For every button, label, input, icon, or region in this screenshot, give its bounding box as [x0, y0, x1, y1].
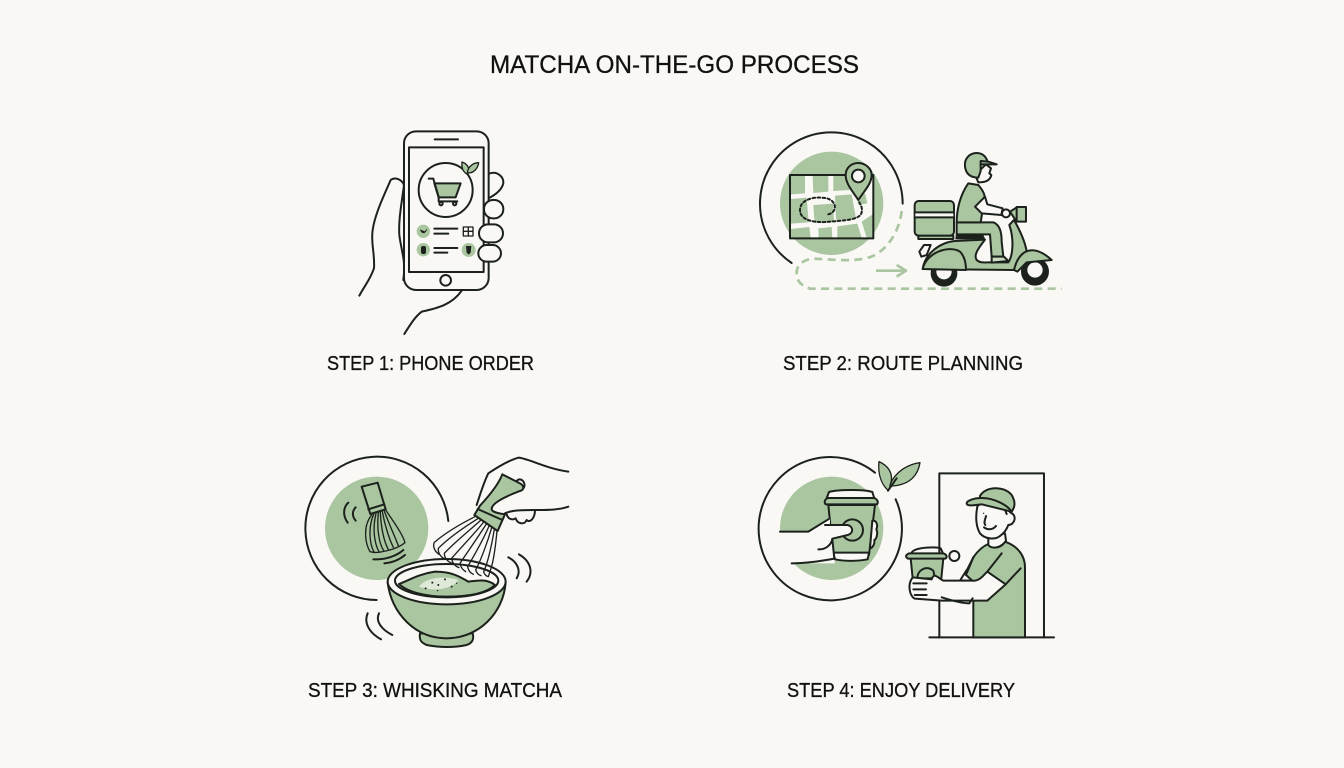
label: step 3: STEP 3: WHISKING MATCHA [308, 680, 563, 702]
icon: circle and leaves [759, 457, 920, 600]
title: MATCHA ON-THE-GO PROCESS [490, 51, 859, 79]
icon: map with route [760, 132, 1062, 289]
icon: hand with large whisk [434, 458, 568, 577]
panel: step 1 phone order [327, 131, 534, 375]
label: step 4: STEP 4: ENJOY DELIVERY [787, 680, 1015, 702]
icon: matcha bowl [366, 554, 530, 647]
panel: step 3 whisking matcha [305, 457, 568, 702]
label: step 2: STEP 2: ROUTE PLANNING [783, 353, 1023, 375]
panel: step 4 enjoy delivery [759, 457, 1054, 702]
icon: hand holding cup [775, 477, 883, 580]
label: step 1: STEP 1: PHONE ORDER [327, 353, 534, 375]
icon: scooter rider with delivery box [915, 153, 1052, 287]
icon: hand holding phone [359, 131, 503, 334]
icon: small whisk in circle [305, 457, 448, 600]
icon: courier in doorway with cup [906, 473, 1054, 637]
panel: step 2 route planning [760, 132, 1062, 375]
